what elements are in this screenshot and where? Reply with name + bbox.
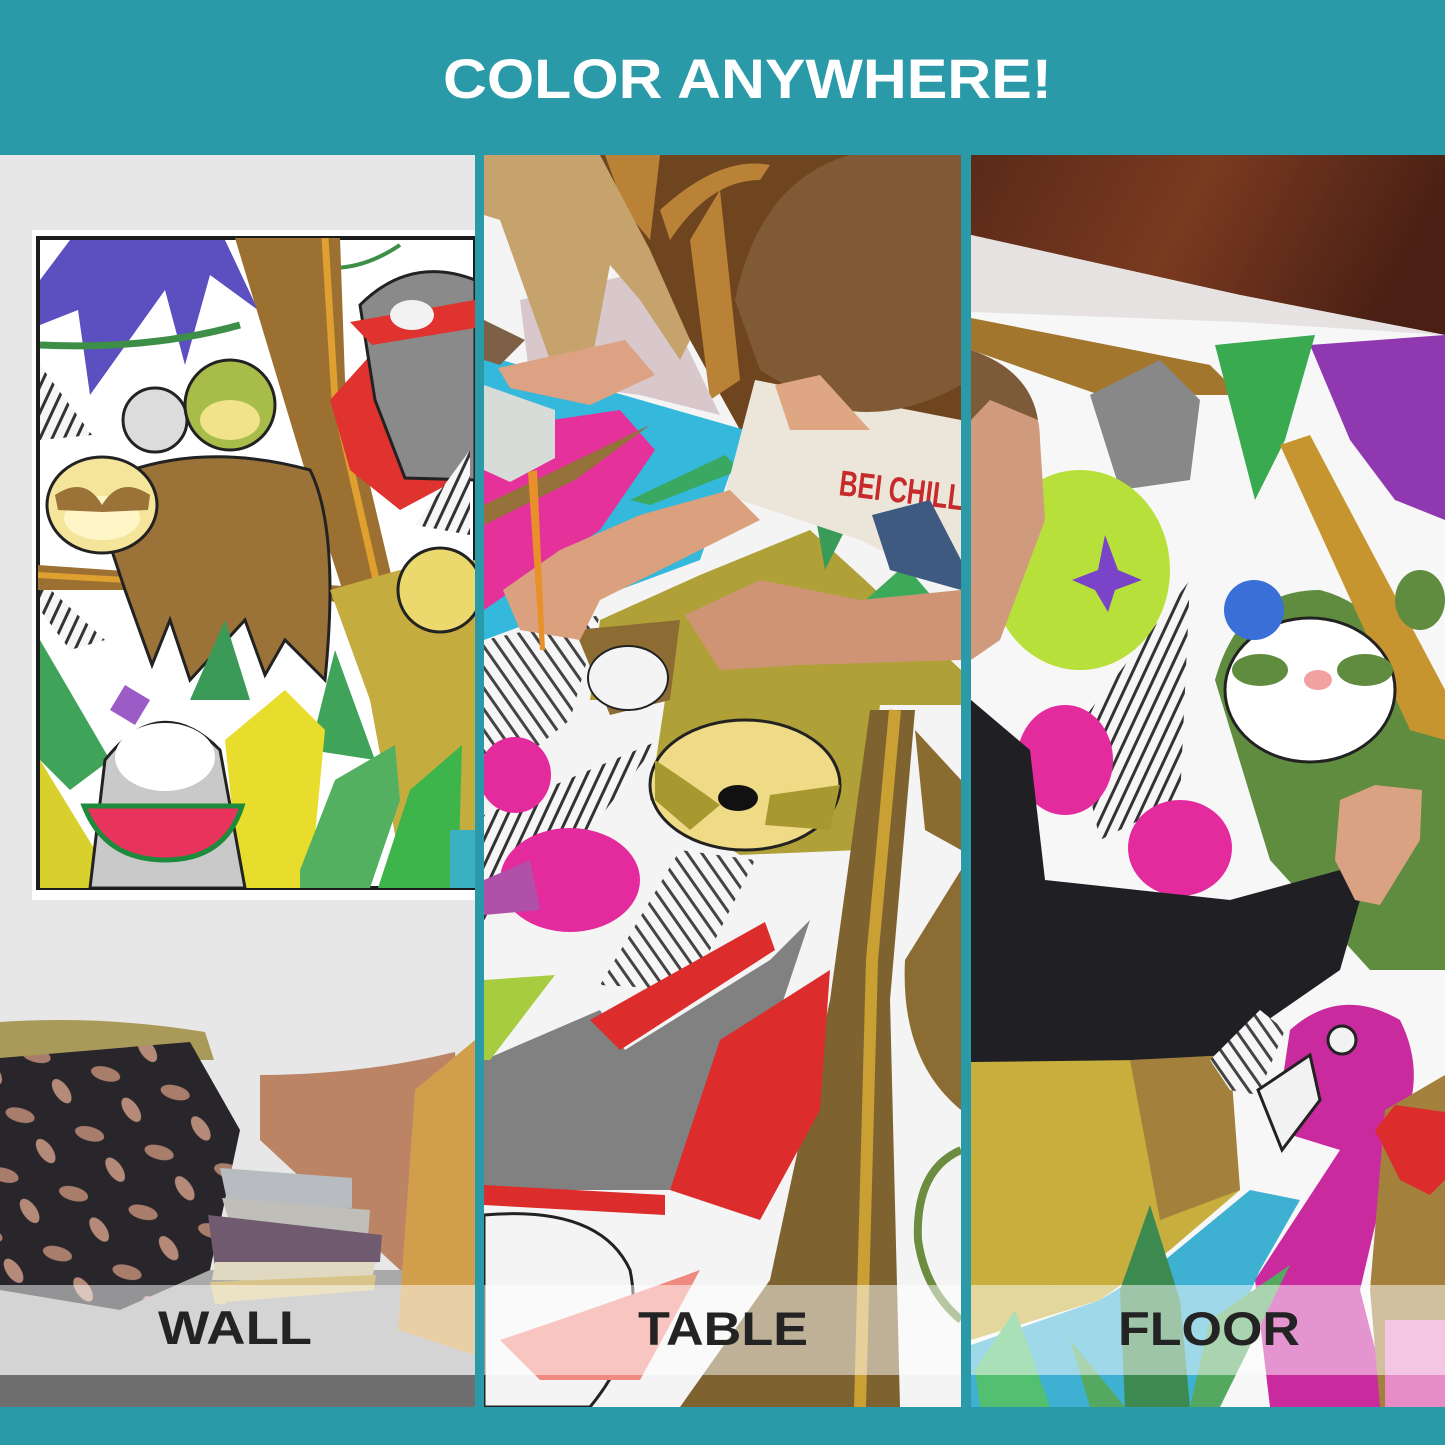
white feather (415, 450, 470, 535)
person head (971, 350, 1045, 660)
green egg with stars (990, 470, 1170, 670)
hero sloth (330, 359, 448, 510)
pink flowers (479, 737, 551, 813)
trunk on right (1280, 435, 1445, 740)
branch (38, 565, 342, 602)
tree trunk (235, 238, 391, 586)
yellow sloth (330, 560, 475, 836)
branch and hanging sloth (971, 318, 1240, 395)
pink corner (1385, 1320, 1445, 1407)
label: floor strip (971, 1285, 1445, 1375)
pencil box (484, 385, 555, 482)
label: wall strip (0, 1285, 475, 1375)
label: table: TABLE (638, 1302, 808, 1355)
boy head (735, 155, 961, 412)
feather leaf behind (1088, 582, 1190, 840)
watermelon sloth (90, 722, 245, 888)
feather lower right (1210, 1010, 1285, 1095)
green leaves (1120, 1205, 1190, 1407)
title: COLOR ANYWHERE! (443, 47, 1052, 110)
flamingo (1255, 1005, 1414, 1407)
black sweater arm (971, 700, 1360, 1065)
basket (0, 1020, 240, 1310)
label: wall: WALL (158, 1301, 312, 1354)
pillow (260, 1052, 470, 1270)
monstera (1310, 335, 1445, 520)
vine (40, 325, 240, 346)
baby sloths (123, 388, 187, 452)
white leaf outlines (40, 365, 105, 650)
olive sloth (590, 530, 961, 855)
yellow sloth bottom (971, 1055, 1240, 1340)
pink flowers (1017, 705, 1113, 815)
yellow leaves (225, 690, 325, 888)
girl (520, 270, 720, 415)
panel: floor (971, 155, 1445, 1407)
hand (1335, 785, 1422, 905)
boy shirt (726, 380, 961, 560)
panel: table: BEI CHILL (837, 462, 966, 518)
water (971, 1190, 1300, 1407)
green leaves (817, 526, 843, 570)
feather leaves (484, 616, 599, 755)
table top colours (484, 355, 745, 640)
blue flower (1224, 580, 1284, 640)
boy arms (503, 490, 760, 640)
green sloth (1215, 590, 1445, 970)
yellow chair (398, 1040, 475, 1355)
purple leaves (40, 240, 258, 395)
panel: wall (0, 155, 482, 1407)
books (208, 1168, 382, 1304)
poster on wall (32, 230, 482, 900)
green plants (300, 745, 400, 888)
chairs background (590, 155, 961, 430)
label: floor: FLOOR (1118, 1302, 1300, 1355)
tree trunk (680, 710, 915, 1407)
pencil (528, 470, 545, 650)
sloth with heart (1370, 1075, 1445, 1407)
red cape sloth (484, 920, 810, 1190)
ferns (40, 640, 110, 790)
big sloth body (105, 457, 330, 680)
label: table strip (484, 1285, 961, 1375)
panel: table (479, 155, 966, 1407)
